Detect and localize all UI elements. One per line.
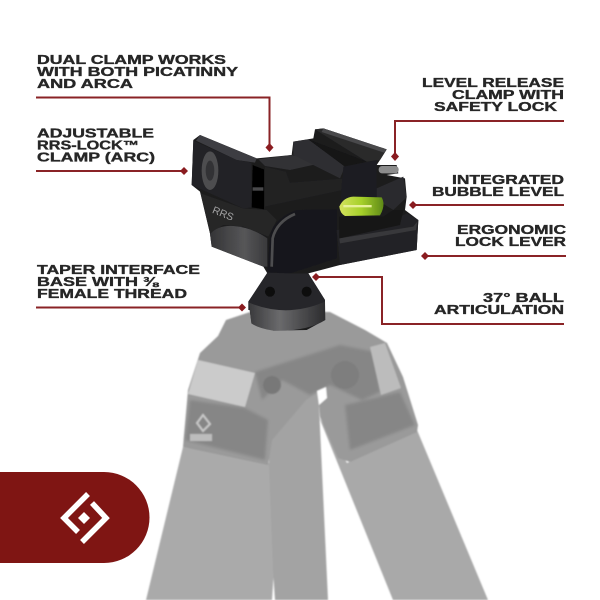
tripod (greyed out) (146, 312, 488, 600)
callout: adjustable clamp (36, 126, 188, 175)
rail top, front (293, 139, 345, 178)
lower body mid tone (201, 193, 277, 237)
label: dual clamp: DUAL CLAMP WORKS (37, 53, 226, 67)
label: bubble level: BUBBLE LEVEL (432, 185, 564, 199)
leader line: taper interface (36, 304, 246, 312)
label: bubble level: INTEGRATED (452, 173, 564, 187)
callout: dual clamp (36, 53, 274, 152)
callout: level release clamp (391, 76, 564, 161)
badge pill (0, 472, 150, 563)
stem highlight (272, 214, 295, 267)
leader line: ball articulation (312, 273, 564, 324)
tripod left collar band (188, 360, 255, 407)
RRS engraving: RRS (211, 205, 235, 224)
leader line: level release clamp (391, 121, 564, 161)
label: adjustable clamp: RRS-LOCK™ (37, 138, 139, 152)
label: level release clamp (422, 76, 564, 114)
callout: lock lever (421, 223, 566, 260)
label: level release clamp: LEVEL RELEASE (422, 76, 564, 90)
label: ball articulation (434, 291, 565, 317)
right side plate (337, 213, 418, 265)
leader line: lock lever (421, 252, 566, 260)
clamp slot (252, 165, 264, 209)
ball head clamp product (192, 128, 418, 331)
tripod right collar band (370, 343, 401, 395)
plate lighter band (339, 222, 417, 243)
ball neck (248, 273, 325, 310)
bubble level vial (339, 197, 383, 216)
label: adjustable clamp (37, 126, 155, 164)
label: taper interface: TAPER INTERFACE (37, 263, 200, 277)
tripod right pivot knob (331, 361, 359, 389)
label: dual clamp: WITH BOTH PICATINNY (37, 65, 239, 79)
right side clamp block (340, 160, 377, 207)
base lighter facet (210, 226, 267, 267)
label: taper interface (37, 263, 200, 301)
tripod left leg (146, 447, 274, 600)
tripod left pivot knob (263, 376, 281, 394)
curved stem arm (267, 209, 337, 273)
tripod centre leg (268, 385, 328, 600)
tripod right leg (319, 417, 488, 600)
callout: ball articulation (312, 273, 565, 324)
wheel hub (206, 161, 214, 181)
label: lock lever: ERGONOMIC (457, 223, 566, 237)
callout: bubble level (409, 173, 564, 209)
label: lock lever (455, 223, 566, 249)
red logo badge (0, 472, 150, 563)
ball ring (249, 302, 325, 331)
label: adjustable clamp: CLAMP (ARC) (37, 150, 155, 164)
label: dual clamp (37, 53, 239, 91)
rail gap (308, 139, 367, 167)
adjustment wheel (202, 151, 218, 190)
tripod hub (183, 312, 418, 465)
leader line: adjustable clamp (36, 167, 188, 175)
clamp slot bright tab (253, 187, 263, 191)
rail top, rear (315, 128, 387, 162)
label: taper interface: FEMALE THREAD (37, 287, 187, 301)
product silhouette (192, 128, 418, 331)
ball set screw right (302, 287, 312, 297)
callout: taper interface (36, 263, 246, 312)
rail highlight (322, 128, 387, 153)
lock lever knob (377, 166, 407, 210)
label: level release clamp: CLAMP WITH (452, 88, 564, 102)
icon: RRS logo (64, 494, 106, 542)
label: ball articulation: 37° BALL (483, 291, 565, 305)
bubble level highlight (343, 205, 372, 207)
leader line: bubble level (409, 201, 564, 209)
label: level release clamp: SAFETY LOCK (434, 100, 557, 114)
label: taper interface: BASE WITH ⅜ (37, 275, 160, 289)
block notch facet (265, 167, 343, 207)
ball set screw left (265, 287, 275, 297)
label: ball articulation: ARTICULATION (434, 303, 564, 317)
level recess (339, 210, 403, 238)
tripod white gap (317, 387, 327, 405)
tripod brand mark (190, 415, 212, 441)
label: lock lever: LOCK LEVER (455, 235, 566, 249)
label: adjustable clamp: ADJUSTABLE (37, 126, 154, 140)
central block top face (258, 155, 320, 170)
label: dual clamp: AND ARCA (37, 77, 133, 91)
left clamp top facet (196, 135, 257, 163)
leader line: dual clamp (36, 98, 274, 152)
label: bubble level (432, 173, 564, 199)
left clamp face (192, 141, 252, 208)
tripod hub shadows (185, 345, 415, 460)
